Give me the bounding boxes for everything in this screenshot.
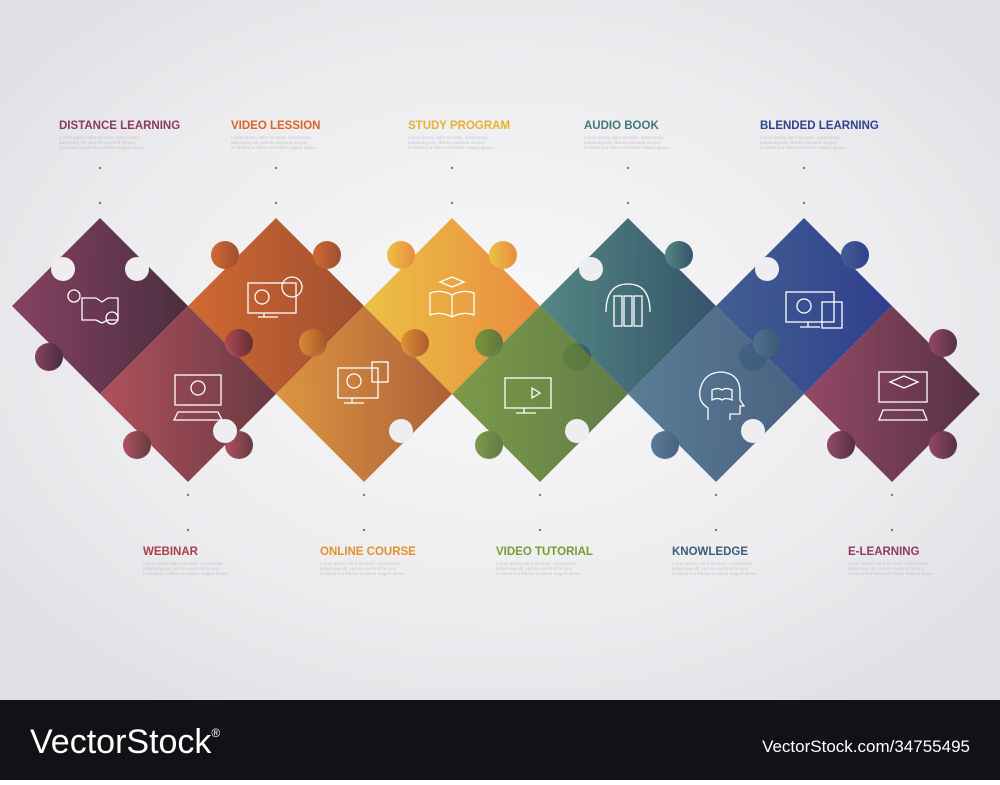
- lorem text blocks: Lorem ipsum dolor sit amet, consectetur: [672, 561, 753, 566]
- piece 3: video lession: [188, 218, 364, 394]
- labels: DISTANCE LEARNING: [59, 120, 180, 132]
- lorem text blocks: Lorem ipsum dolor sit amet, consectetur: [231, 135, 312, 140]
- lorem text blocks: incididunt ut labore et dolore magna aliqua: [408, 145, 493, 150]
- lorem text blocks: Lorem ipsum dolor sit amet, consectetur: [848, 561, 929, 566]
- lorem text blocks: adipiscing elit, sed do eiusmod tempor: [584, 140, 661, 145]
- lorem text blocks: adipiscing elit, sed do eiusmod tempor: [320, 566, 397, 571]
- lorem text blocks: incididunt ut labore et dolore magna aliqua: [584, 145, 669, 150]
- lorem text blocks: incididunt ut labore et dolore magna aliqua: [496, 571, 581, 576]
- labels: BLENDED LEARNING: [760, 120, 879, 132]
- footer: [0, 700, 1000, 780]
- lorem text blocks: incididunt ut labore et dolore magna aliqua: [59, 145, 144, 150]
- piece 1: distance learning: [12, 218, 188, 394]
- icon: study book: [430, 277, 474, 317]
- holes: [51, 257, 779, 443]
- icon: video lesson: [248, 277, 302, 317]
- lorem text blocks: incididunt ut labore et dolore magna aliqua: [848, 571, 933, 576]
- icon: map book: [68, 290, 118, 324]
- piece 2: webinar: [100, 306, 276, 482]
- lorem text blocks: Lorem ipsum dolor sit amet, consectetur: [143, 561, 224, 566]
- lorem text blocks: [59, 135, 933, 576]
- footer: VectorStock: [30, 723, 211, 761]
- icons: [68, 277, 927, 420]
- icon: e-learning: [879, 372, 927, 420]
- icon: webinar monitor: [174, 375, 222, 420]
- icon: knowledge head: [700, 372, 744, 420]
- icon: blended: [786, 292, 842, 328]
- piece 10: e-learning: [804, 306, 980, 482]
- lorem text blocks: adipiscing elit, sed do eiusmod tempor: [143, 566, 220, 571]
- icon: video tutorial: [505, 378, 551, 413]
- lorem text blocks: Lorem ipsum dolor sit amet, consectetur: [760, 135, 841, 140]
- lorem text blocks: Lorem ipsum dolor sit amet, consectetur: [408, 135, 489, 140]
- lorem text blocks: adipiscing elit, sed do eiusmod tempor: [231, 140, 308, 145]
- lorem text blocks: adipiscing elit, sed do eiusmod tempor: [760, 140, 837, 145]
- icon: audio book: [606, 284, 650, 326]
- labels: E-LEARNING: [848, 546, 920, 558]
- piece 9: blended learning: [716, 218, 892, 394]
- lorem text blocks: adipiscing elit, sed do eiusmod tempor: [848, 566, 925, 571]
- labels: WEBINAR: [143, 546, 199, 558]
- labels: VIDEO TUTORIAL: [496, 546, 593, 558]
- lorem text blocks: incididunt ut labore et dolore magna aliqua: [760, 145, 845, 150]
- labels: AUDIO BOOK: [584, 120, 659, 132]
- footer: ®: [211, 726, 220, 740]
- piece 6: video tutorial: [452, 306, 628, 482]
- lorem text blocks: adipiscing elit, sed do eiusmod tempor: [59, 140, 136, 145]
- piece 8: knowledge: [628, 306, 804, 482]
- footer: VectorStock.com/34755495: [762, 737, 970, 756]
- lorem text blocks: Lorem ipsum dolor sit amet, consectetur: [320, 561, 401, 566]
- lorem text blocks: incididunt ut labore et dolore magna aliqua: [320, 571, 405, 576]
- lorem text blocks: Lorem ipsum dolor sit amet, consectetur: [496, 561, 577, 566]
- lorem text blocks: Lorem ipsum dolor sit amet, consectetur: [59, 135, 140, 140]
- labels: VIDEO LESSION: [231, 120, 320, 132]
- piece 5: study program: [364, 218, 540, 394]
- lorem text blocks: adipiscing elit, sed do eiusmod tempor: [496, 566, 573, 571]
- lorem text blocks: incididunt ut labore et dolore magna aliqua: [672, 571, 757, 576]
- lorem text blocks: adipiscing elit, sed do eiusmod tempor: [672, 566, 749, 571]
- lorem text blocks: adipiscing elit, sed do eiusmod tempor: [408, 140, 485, 145]
- piece 7: audio book: [540, 218, 716, 394]
- icon: online course: [338, 362, 388, 403]
- lorem text blocks: incididunt ut labore et dolore magna aliqua: [143, 571, 228, 576]
- lorem text blocks: Lorem ipsum dolor sit amet, consectetur: [584, 135, 665, 140]
- labels: STUDY PROGRAM: [408, 120, 510, 132]
- labels: KNOWLEDGE: [672, 546, 748, 558]
- lorem text blocks: incididunt ut labore et dolore magna aliqua: [231, 145, 316, 150]
- dots: [99, 167, 893, 531]
- piece 4: online course: [276, 306, 452, 482]
- labels: ONLINE COURSE: [320, 546, 416, 558]
- labels: [59, 120, 920, 558]
